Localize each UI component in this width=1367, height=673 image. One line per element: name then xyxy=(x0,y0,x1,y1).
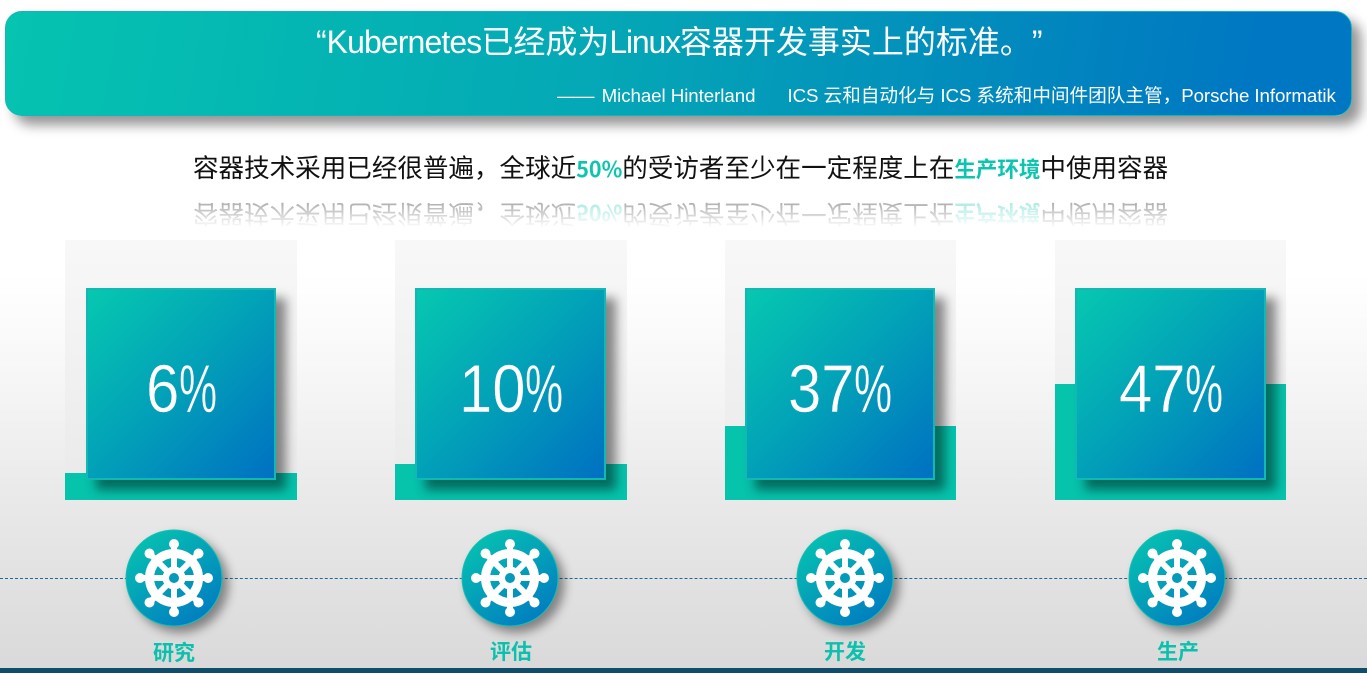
stat card: 6% xyxy=(86,288,276,480)
label: research: 研究 xyxy=(153,642,195,665)
icon: ship wheel, evaluation xyxy=(461,529,571,639)
stat card: 47%: 47 xyxy=(1118,351,1185,427)
stat card: 6%: % xyxy=(178,351,217,427)
stat card: 37% xyxy=(745,288,935,480)
label: development: 开发 xyxy=(824,641,866,664)
stat card: 37%: % xyxy=(854,351,892,427)
banner xyxy=(5,11,1352,116)
label: production: 生产 xyxy=(1157,641,1199,664)
quote headline: “Kubernetes已经成为Linux容器开发事实上的标准。 ” xyxy=(316,24,1043,60)
stat card: 47% xyxy=(1075,288,1266,480)
mirrored reflection of summary sentence: 容器技术采用已经很普遍，全球近50%的受访者至少在一定程度上在生产环境中使用容器 xyxy=(193,198,1168,229)
bar column: research 6% xyxy=(65,240,297,500)
bar column: evaluation 10% xyxy=(395,240,627,500)
footer bar xyxy=(0,668,1367,673)
label: evaluation: 评估 xyxy=(490,641,532,664)
icon: ship wheel, research xyxy=(125,529,235,639)
bar column: development 37% xyxy=(725,240,956,500)
summary sentence: 容器技术采用已经很普遍，全球近50%的受访者至少在一定程度上在生产环境中使用容器 xyxy=(193,153,1168,184)
quote attribution: —— Michael Hinterland ICS 云和自动化与 ICS 系统和中间件团队主管，Porsche Informatik xyxy=(557,85,1336,106)
icon: ship wheel, production xyxy=(1128,529,1238,639)
stat card: 10%: % xyxy=(524,351,563,427)
stat card: 47%: % xyxy=(1184,351,1223,427)
stat card: 6%: 6 xyxy=(146,351,179,427)
bar column: production 47% xyxy=(1055,240,1286,500)
stat card: 37%: 37 xyxy=(788,351,855,427)
stat card: 10%: 10 xyxy=(458,351,525,427)
dashed timeline xyxy=(0,578,1367,579)
icon: ship wheel, development xyxy=(796,529,906,639)
stat card: 10% xyxy=(415,288,606,480)
